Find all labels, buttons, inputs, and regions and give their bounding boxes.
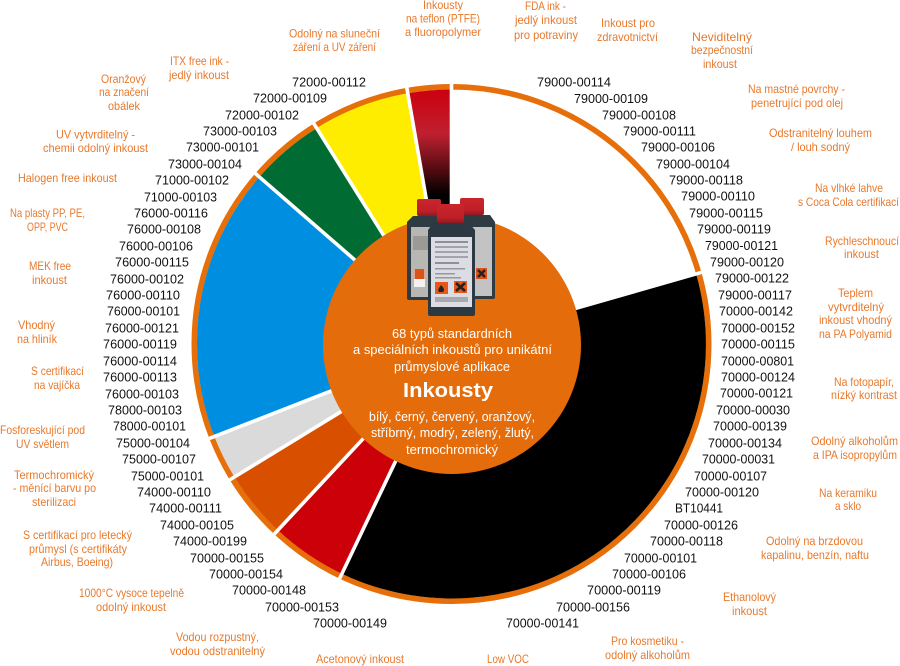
- label: UV resistant: [289, 26, 381, 54]
- product codes: right side: 70000-00107: [694, 468, 767, 484]
- product codes: right side: 70000-00118: [650, 534, 723, 548]
- label: halogen free: Halogen free inkoust: [18, 171, 118, 185]
- product codes: right side: 79000-00110: [681, 188, 755, 204]
- label: heat cured: vytvrditelný: [828, 300, 884, 314]
- product codes: left side: 76000-00110: [106, 288, 180, 302]
- product codes: right side: 79000-00109: [574, 91, 648, 106]
- product codes: left side: 76000-00119: [103, 336, 177, 352]
- pie chart: [194, 82, 709, 601]
- label: eggs: S certifikací: [31, 364, 85, 378]
- label: heat cured: [819, 286, 892, 341]
- label: envelopes: Oranžový: [101, 72, 146, 86]
- label: MEK free: inkoust: [32, 273, 68, 287]
- label: heat cured: Teplem: [838, 286, 873, 300]
- product codes: right side: 70000-00124: [721, 370, 795, 384]
- label: wet bottles: Na vlhké lahve: [815, 181, 883, 195]
- product codes: left side: 76000-00106: [119, 238, 193, 254]
- product codes: right side: 70000-00030: [716, 402, 790, 418]
- product codes: left side: 76000-00108: [127, 222, 201, 236]
- product codes: right side: 79000-00120: [710, 254, 784, 270]
- label: thermochromic: Termochromický: [14, 468, 94, 482]
- label: FDA: [514, 0, 578, 42]
- product codes: right side: 70000-00134: [708, 436, 782, 450]
- product codes: right side: 79000-00106: [641, 140, 715, 154]
- product codes: right side: 79000-00121: [705, 238, 778, 253]
- product codes: right side: 70000-00126: [664, 518, 738, 532]
- product codes: left side: 74000-00105: [160, 518, 234, 532]
- label: phosphorescent: UV světlem: [16, 437, 69, 451]
- label: brake fluid: [761, 534, 869, 562]
- centre description: a speciálních inkoustů pro unikátní: [353, 343, 553, 357]
- label: fast drying: inkoust: [844, 247, 880, 261]
- product codes: left side: 72000-00109: [253, 90, 327, 106]
- product codes: left side: 73000-00103: [203, 124, 277, 138]
- label: MEK free: [29, 259, 71, 287]
- label: aviation: Airbus, Boeing): [41, 555, 113, 569]
- label: healthcare: [597, 16, 659, 44]
- label: cosmetics: [605, 634, 690, 662]
- label: wet bottles: [798, 181, 900, 209]
- label: envelopes: na značení: [99, 85, 150, 99]
- label: aviation: S certifikací pro letecký: [23, 528, 132, 542]
- label: UV curable: UV vytvrditelný -: [56, 128, 135, 142]
- product codes: left side: 72000-00112: [292, 74, 366, 90]
- product codes: left side: 76000-00101: [107, 304, 180, 318]
- centre circle: [323, 216, 581, 474]
- centre description: bílý, černý, červený, oranžový,: [369, 410, 535, 424]
- product codes: right side: 79000-00119: [697, 222, 771, 236]
- label: phosphorescent: Fosforeskující pod: [0, 423, 85, 437]
- product codes: right side: 70000-00031: [702, 452, 775, 466]
- label: aviation: [23, 528, 132, 569]
- right bottle: [458, 198, 495, 299]
- front bottle: [428, 204, 475, 316]
- product codes: left side: [103, 74, 387, 630]
- segment: yellow: [317, 93, 452, 344]
- label: invisible security: Neviditelný: [692, 30, 752, 44]
- label: eggs: na vajíčka: [34, 378, 80, 392]
- label: ITX free: ITX free ink -: [170, 54, 229, 68]
- product codes: left side: 78000-00101: [113, 418, 186, 434]
- centre description: [353, 327, 553, 457]
- segment: green: [259, 128, 452, 344]
- product codes: left side: 76000-00115: [115, 254, 189, 270]
- outer orange ring: [194, 87, 709, 601]
- centre description: průmyslové aplikace: [394, 360, 510, 374]
- label: oily surfaces: penetrující pod olej: [751, 96, 843, 110]
- product codes: left side: 73000-00104: [168, 156, 242, 172]
- product codes: left side: 76000-00102: [110, 272, 184, 286]
- label: ethanol: Ethanolový: [723, 590, 776, 604]
- label: photo paper: [831, 375, 898, 402]
- label: aluminium: na hliník: [17, 332, 58, 346]
- segment: dark orange: [234, 344, 452, 530]
- label: ceramics: Na keramiku: [819, 486, 877, 500]
- product codes: left side: 75000-00104: [116, 436, 190, 450]
- product codes: right side: 70000-00121: [720, 386, 793, 400]
- label: ITX free: [168, 54, 230, 82]
- product codes: left side: 70000-00148: [232, 582, 306, 598]
- centre description: termochromický: [406, 443, 499, 457]
- segment: thermochromic red to black: [408, 90, 452, 344]
- centre title: Inkousty: [403, 380, 494, 402]
- label: envelopes: [99, 72, 150, 113]
- product codes: left side: 71000-00102: [155, 172, 229, 188]
- product codes: left side: 74000-00111: [149, 500, 222, 516]
- product codes: right side: 70000-00142: [719, 304, 793, 318]
- label: UV resistant: Odolný na sluneční: [289, 26, 381, 40]
- product codes: right side: 79000-00111: [623, 124, 696, 138]
- label: caustic removal: Odstranitelný louhem: [769, 126, 872, 140]
- label: heat cured: inkoust vhodný: [819, 313, 892, 327]
- segment: silver: [214, 344, 452, 477]
- product codes: left side: 70000-00153: [265, 600, 339, 614]
- label: aluminium: Vhodný: [18, 318, 55, 332]
- label: low VOC: Low VOC: [487, 652, 529, 666]
- product codes: left side: 74000-00110: [137, 484, 211, 500]
- product codes: left side: 70000-00154: [209, 566, 283, 582]
- label: thermochromic: - měnící barvu po: [13, 481, 96, 495]
- centre description: 68 typů standardních: [392, 327, 512, 341]
- product codes: right side: 70000-00139: [713, 418, 787, 434]
- product codes: left side: 76000-00116: [134, 206, 208, 220]
- product codes: right side: 79000-00104: [656, 156, 730, 172]
- label: fast drying: [825, 234, 900, 261]
- label: invisible security: [691, 30, 754, 71]
- label: FDA: pro potraviny: [514, 28, 578, 42]
- label: caustic removal: / louh sodný: [791, 140, 850, 154]
- product codes: left side: 70000-00155: [190, 550, 264, 566]
- label: cosmetics: odolný alkoholům: [605, 648, 690, 662]
- product codes: right side: BT10441: [675, 500, 723, 516]
- label: PTFE: a fluoropolymer: [405, 25, 481, 39]
- segment: blue: [197, 177, 452, 436]
- segment: black: [342, 274, 706, 598]
- product codes: right side: 70000-00141: [506, 616, 579, 630]
- product codes: left side: 73000-00101: [186, 140, 259, 154]
- label: high temperature: odolný inkoust: [96, 600, 167, 614]
- product codes: right side: 70000-00152: [721, 320, 795, 336]
- label: PTFE: [405, 0, 481, 39]
- label: ceramics: a sklo: [835, 499, 861, 513]
- product codes: right side: 79000-00118: [669, 172, 743, 188]
- label: ITX free: jedlý inkoust: [168, 68, 230, 82]
- product codes: right side: 79000-00114: [537, 74, 611, 90]
- label: thermochromic: sterilizaci: [32, 495, 76, 509]
- label: plastics: OPP, PVC: [27, 220, 68, 234]
- label: water soluble: vodou odstranitelný: [170, 644, 265, 658]
- label: ceramics: [819, 486, 877, 513]
- label: alcohol resistant: [811, 434, 898, 462]
- product codes: right side: 79000-00115: [689, 206, 763, 220]
- product codes: left side: 76000-00114: [103, 354, 177, 368]
- label: ethanol: inkoust: [732, 604, 768, 618]
- label: plastics: [10, 206, 85, 234]
- label: MEK free: MEK free: [29, 259, 71, 273]
- product codes: right side: 70000-00120: [685, 484, 759, 500]
- label: brake fluid: Odolný na brzdovou: [766, 534, 863, 548]
- centre description: stříbrný, modrý, zelený, žlutý,: [371, 426, 534, 440]
- label: thermochromic: [13, 468, 96, 509]
- product codes: right side: 70000-00101: [624, 550, 697, 566]
- product codes: right side: 79000-00122: [715, 270, 789, 286]
- product codes: right side: [506, 74, 795, 630]
- left bottle: [407, 199, 448, 300]
- label: high temperature: [79, 586, 184, 614]
- product codes: right side: 70000-00115: [721, 336, 795, 352]
- label: ethanol: [723, 590, 776, 618]
- icon: ink bottles: [407, 198, 495, 316]
- product codes: left side: 76000-00113: [103, 370, 177, 384]
- label: oily surfaces: Na mastné povrchy -: [748, 82, 845, 96]
- label: phosphorescent: [0, 423, 85, 451]
- label: oily surfaces: [748, 82, 845, 110]
- label: plastics: Na plasty PP, PE,: [10, 206, 85, 220]
- product codes: left side: 78000-00103: [108, 402, 182, 418]
- label: FDA: jedlý inkoust: [514, 13, 578, 27]
- label: cosmetics: Pro kosmetiku -: [611, 634, 684, 648]
- product codes: right side: 79000-00117: [718, 288, 792, 302]
- label: high temperature: 1000°C vysoce tepelně: [79, 586, 184, 600]
- product codes: right side: 70000-00106: [612, 566, 686, 582]
- label: UV curable: [43, 128, 149, 155]
- label: acetone: Acetonový inkoust: [316, 652, 405, 666]
- product codes: left side: 76000-00103: [105, 386, 179, 402]
- product codes: left side: 71000-00103: [144, 190, 217, 204]
- product codes: left side: 74000-00199: [173, 534, 247, 548]
- label: aviation: průmysl (s certifikáty: [29, 542, 127, 556]
- label: brake fluid: kapalinu, benzín, naftu: [761, 548, 869, 562]
- label: healthcare: zdravotnictví: [597, 30, 659, 44]
- segment: red: [278, 344, 452, 574]
- label: invisible security: bezpečnostní: [691, 43, 754, 57]
- product codes: right side: 70000-00119: [587, 582, 661, 598]
- product codes: left side: 72000-00102: [225, 108, 299, 122]
- label: water soluble: [170, 630, 265, 658]
- product codes: right side: 70000-00156: [556, 600, 630, 614]
- product codes: left side: 76000-00121: [105, 320, 179, 336]
- label: UV resistant: záření a UV záření: [293, 40, 377, 54]
- label: caustic removal: [769, 126, 872, 154]
- label: invisible security: inkoust: [703, 57, 738, 71]
- product codes: left side: 75000-00101: [131, 468, 204, 484]
- label: PTFE: na teflon (PTFE): [406, 12, 480, 26]
- label: UV curable: chemii odolný inkoust: [43, 141, 149, 155]
- product codes: right side: 70000-00801: [721, 354, 794, 368]
- product codes: left side: 70000-00149: [313, 616, 387, 630]
- label: eggs: [31, 364, 85, 392]
- label: envelopes: obálek: [108, 99, 141, 113]
- label: water soluble: Vodou rozpustný,: [176, 630, 259, 644]
- product codes: right side: 79000-00108: [602, 108, 676, 122]
- product codes: left side: 75000-00107: [122, 452, 196, 466]
- label: healthcare: Inkoust pro: [601, 16, 655, 30]
- label: aluminium: [17, 318, 58, 346]
